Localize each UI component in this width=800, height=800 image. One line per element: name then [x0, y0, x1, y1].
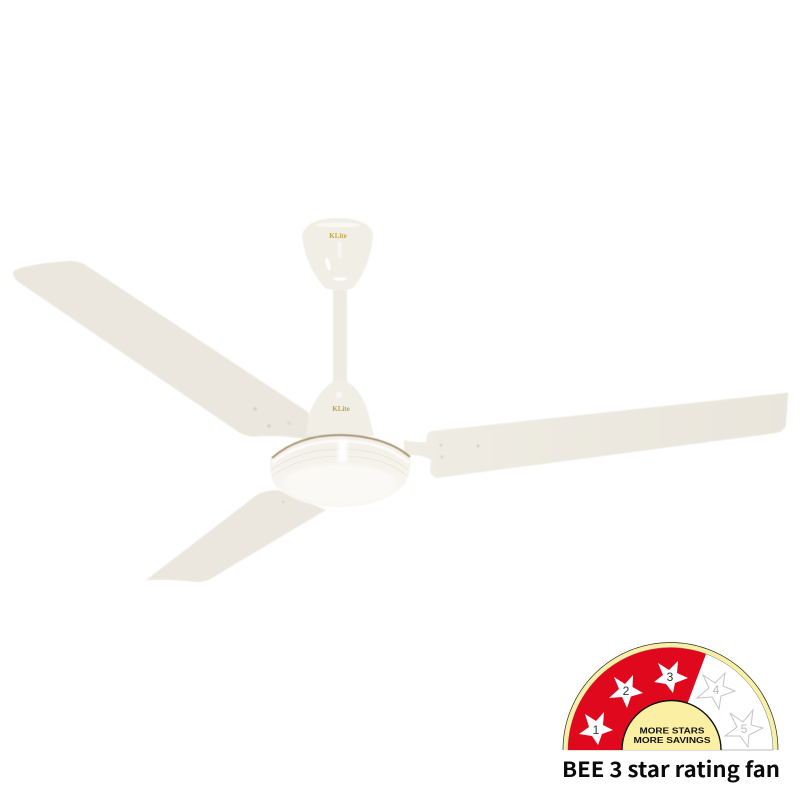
lower bowl [270, 435, 410, 507]
blade: lower left [146, 490, 326, 582]
badge outer rim [563, 642, 778, 750]
motor housing [306, 380, 374, 436]
star 2: 2 [623, 684, 630, 698]
badge white segment [568, 648, 773, 750]
star 3 [654, 661, 688, 693]
badge inner panel [622, 700, 721, 750]
star 1 [579, 712, 613, 745]
blade: right [404, 393, 788, 478]
star 5 [725, 710, 763, 747]
energy star badge [563, 642, 778, 750]
logo: motor: KLite [332, 405, 350, 413]
star 4: 4 [713, 683, 720, 697]
ceiling canopy [302, 218, 373, 290]
badge red segment [568, 648, 706, 750]
star 4 [697, 673, 735, 709]
down rod [333, 290, 347, 385]
rating label: BEE 3 star rating fan [562, 754, 780, 784]
badge caption: MORE SAVINGS [634, 735, 711, 745]
badge caption: MORE STARS [640, 726, 705, 736]
fan [13, 218, 788, 582]
star 1: 1 [593, 723, 600, 737]
star 2 [609, 675, 643, 708]
logo: canopy: KLite [329, 232, 347, 240]
blade: upper left [13, 261, 318, 440]
badge caption [634, 726, 711, 745]
star 3: 3 [667, 670, 674, 684]
star 5: 5 [741, 722, 748, 736]
gold trim ring [272, 435, 410, 458]
